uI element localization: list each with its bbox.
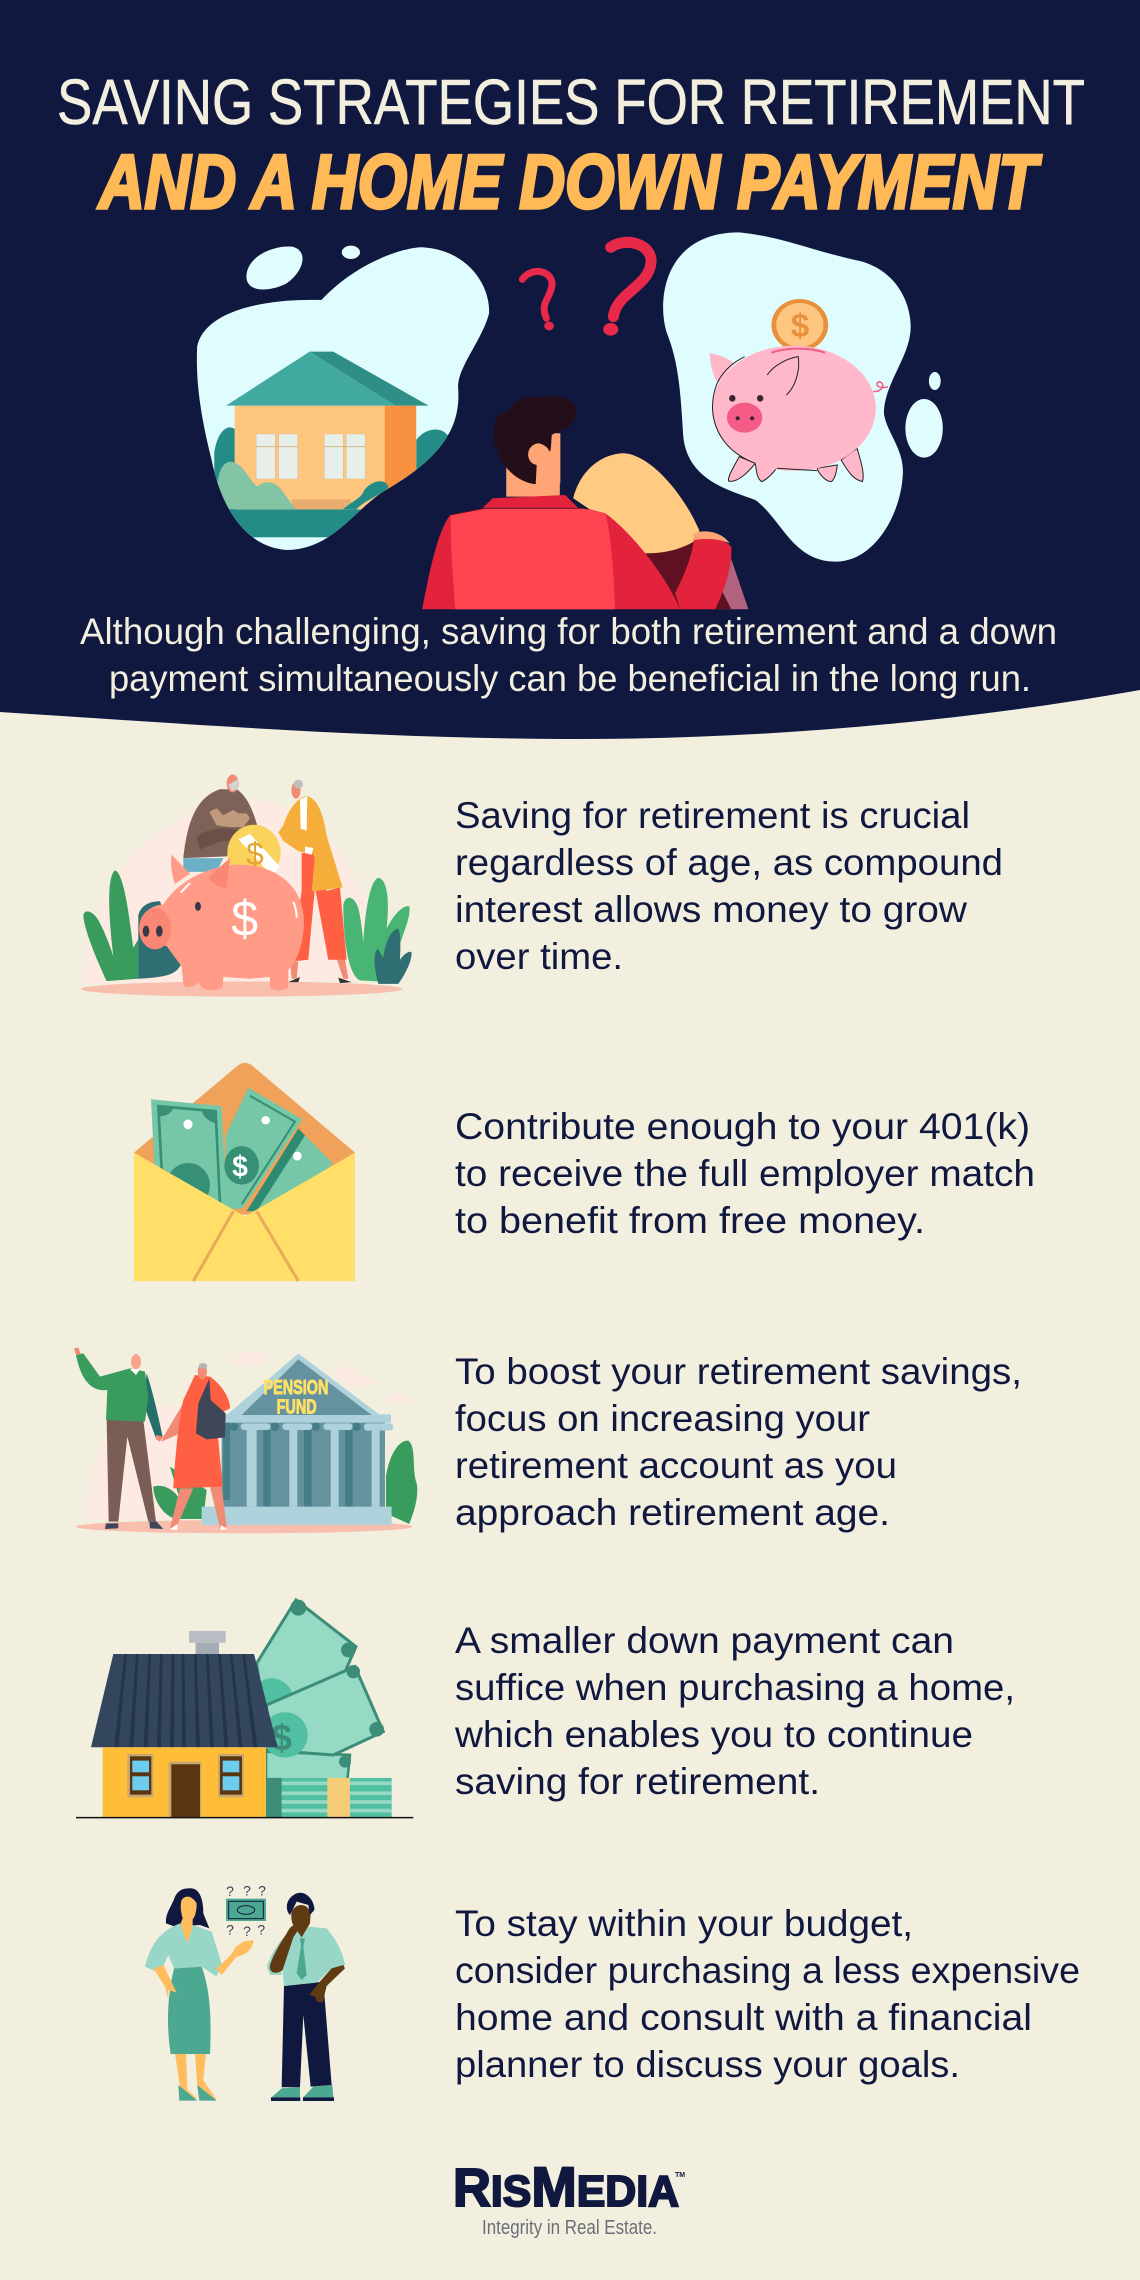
envelope front	[134, 1153, 355, 1281]
text: 401(k): to benefit from free money.	[455, 1199, 925, 1241]
pension fund sign	[263, 1376, 328, 1419]
house	[91, 1631, 278, 1817]
question marks	[522, 242, 651, 336]
text: boost savings: To boost your retirement savings,	[455, 1350, 1022, 1392]
pension building	[202, 1353, 393, 1525]
man	[267, 1893, 345, 2101]
pension fund sign: FUND	[277, 1396, 317, 1419]
text: smaller down payment: saving for retirement.	[455, 1760, 820, 1802]
text: 401(k)	[455, 1105, 1035, 1241]
text: smaller down payment: which enables you to continue	[454, 1713, 973, 1755]
tagline: Integrity in Real Estate.	[482, 2217, 657, 2239]
text: saving for retirement: Saving for retirement is crucial	[455, 794, 970, 836]
text: stay within budget: home and consult with a financial	[455, 1996, 1032, 2038]
hero illustration	[197, 232, 943, 609]
text: boost savings: approach retirement age.	[455, 1491, 890, 1533]
pension fund sign: PENSION	[263, 1376, 328, 1399]
intro text: payment simultaneously can be beneficial in the long run.	[109, 657, 1031, 699]
text: saving for retirement: regardless of age, as compound	[455, 841, 1003, 883]
text: stay within budget: planner to discuss your goals.	[455, 2043, 960, 2085]
piggy bank: $	[231, 892, 258, 947]
money with question marks	[226, 1882, 266, 1939]
text: stay within budget	[455, 1902, 1080, 2085]
banknotes	[250, 1600, 384, 1787]
woman with bag	[162, 1363, 230, 1530]
coin	[227, 825, 281, 881]
text: 401(k): to receive the full employer match	[455, 1152, 1035, 1194]
piggy bank	[139, 855, 304, 990]
illustration: couple and pension fund	[74, 1347, 417, 1533]
header panel	[0, 0, 1140, 739]
text: smaller down payment: A smaller down payment can	[455, 1619, 954, 1661]
illustration: envelope with cash	[134, 1063, 355, 1281]
money with question marks: ?	[226, 1922, 234, 1938]
thought bubble: house	[197, 246, 489, 550]
man	[183, 774, 257, 872]
text: stay within budget: consider purchasing a less expensive	[455, 1949, 1080, 1991]
intro text	[80, 610, 1057, 699]
illustration: couple and piggy bank	[81, 774, 412, 997]
money with question marks: ?	[257, 1922, 265, 1938]
text: boost savings: retirement account as you	[455, 1444, 897, 1486]
text: 401(k): Contribute enough to your 401(k)	[455, 1105, 1030, 1147]
illustration: consulting with a planner	[145, 1882, 345, 2101]
coin: $	[246, 836, 264, 872]
text: saving for retirement: over time.	[455, 935, 623, 977]
cash stacks	[266, 1778, 392, 1817]
illustration: house and banknotes	[76, 1600, 413, 1818]
money with question marks: ?	[243, 1882, 251, 1898]
text: smaller down payment: suffice when purchasing a home,	[455, 1666, 1015, 1708]
text: smaller down payment	[454, 1619, 1015, 1802]
icon: coin dollar sign: $	[791, 307, 809, 344]
banknotes: $	[271, 1717, 292, 1758]
text: stay within budget: To stay within your budget,	[455, 1902, 913, 1944]
text: boost savings	[455, 1350, 1022, 1533]
woman	[145, 1888, 253, 2101]
thought bubble: piggy bank	[663, 232, 943, 562]
intro text: Although challenging, saving for both retirement and a down	[80, 610, 1057, 652]
woman	[278, 780, 352, 983]
money with question marks: ?	[258, 1882, 266, 1898]
text: boost savings: focus on increasing your	[455, 1397, 870, 1439]
title	[57, 66, 1085, 225]
logo: RisMedia: TM	[675, 2172, 685, 2179]
money with question marks: ?	[243, 1923, 251, 1939]
banknotes	[151, 1088, 333, 1218]
leaves	[153, 1441, 417, 1524]
waving man	[74, 1347, 163, 1529]
logo: RisMedia: RISMEDIA	[453, 2155, 679, 2218]
couple seen from behind	[422, 396, 748, 609]
banknotes: $	[232, 1151, 248, 1184]
money with question marks: ?	[226, 1883, 234, 1899]
text: saving for retirement: interest allows money to grow	[455, 888, 968, 930]
text: saving for retirement	[455, 794, 1003, 977]
